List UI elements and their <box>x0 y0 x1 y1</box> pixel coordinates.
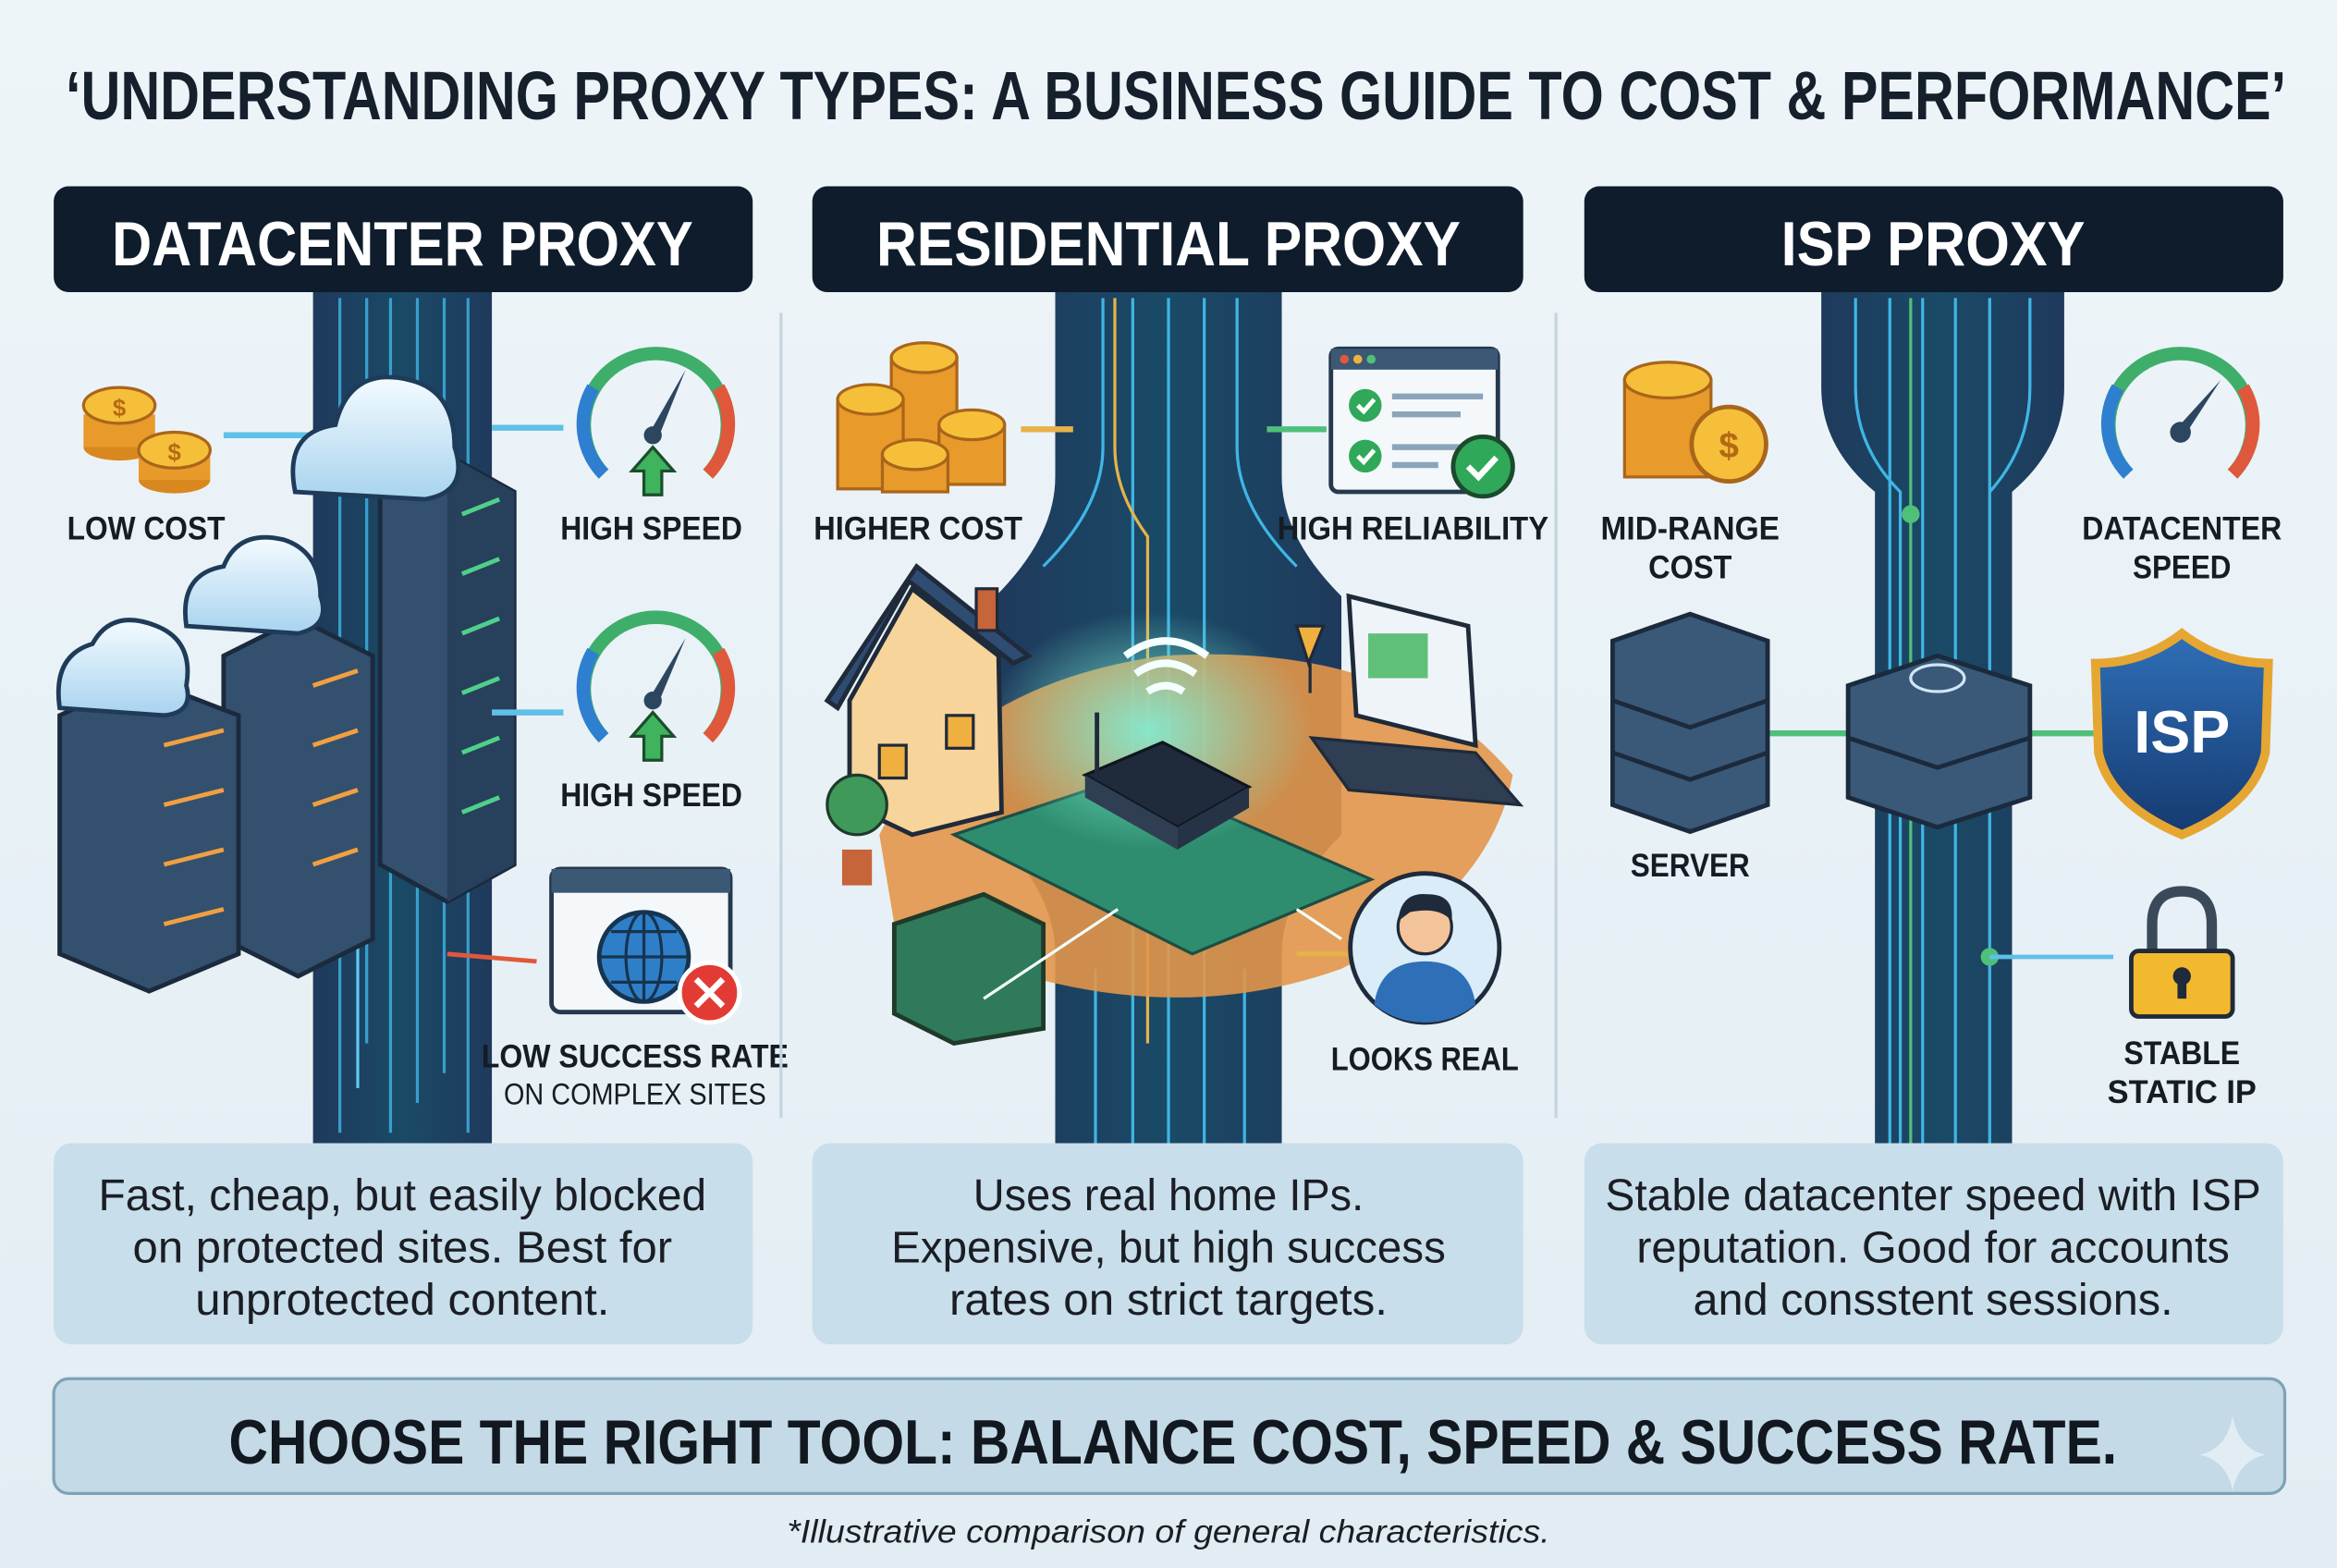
footnote: *Illustrative comparison of general characteristics. <box>787 1513 1550 1550</box>
icon: person looks real <box>1297 874 1499 1023</box>
icon: isp shield: ISP <box>2134 699 2230 766</box>
description: datacenter <box>54 1144 752 1344</box>
label: stable static ip: STABLE <box>2123 1035 2240 1072</box>
label: mid-range cost <box>1601 510 1780 586</box>
description: isp: and consstent sessions. <box>1693 1275 2173 1325</box>
label: high reliability: HIGH RELIABILITY <box>1278 510 1548 547</box>
description: residential <box>813 1144 1523 1344</box>
label: mid-range cost: COST <box>1648 549 1732 586</box>
header: residential proxy <box>813 187 1523 292</box>
icon: reliability checklist <box>1266 349 1512 496</box>
header: residential proxy: RESIDENTIAL PROXY <box>876 210 1461 279</box>
description: datacenter: unprotected content. <box>195 1275 609 1325</box>
label: higher cost: HIGHER COST <box>814 510 1022 547</box>
label: stable static ip <box>2108 1035 2257 1110</box>
panel: isp proxy <box>1585 187 2283 1344</box>
label: low success rate <box>482 1037 789 1111</box>
icon: gauge high speed 2 <box>492 618 728 760</box>
label: mid-range cost: MID-RANGE <box>1601 510 1780 547</box>
header: datacenter proxy: DATACENTER PROXY <box>112 210 693 279</box>
description: isp <box>1585 1144 2283 1344</box>
label: datacenter speed: SPEED <box>2133 549 2231 586</box>
panel: datacenter proxy <box>54 187 789 1344</box>
label: server: SERVER <box>1631 847 1750 884</box>
label: looks real: LOOKS REAL <box>1331 1041 1519 1078</box>
icon: blocked browser <box>447 869 740 1023</box>
icon: isp shield <box>2096 633 2269 835</box>
label: stable static ip: STATIC IP <box>2108 1073 2257 1110</box>
icon: coins mid-range <box>1624 362 1766 482</box>
label: high speed 2: HIGH SPEED <box>560 777 742 814</box>
description: residential: Uses real home IPs. <box>973 1170 1364 1220</box>
icon: coins low cost <box>83 387 316 494</box>
description: isp: reputation. Good for accounts <box>1636 1223 2230 1273</box>
icon: padlock <box>2131 891 2233 1016</box>
icon: server stack <box>1612 614 2104 832</box>
icon: gauge high speed 1 <box>492 353 728 495</box>
road: isp <box>1821 292 2113 1145</box>
icon: coins higher cost <box>838 343 1073 492</box>
label: low success rate: ON COMPLEX SITES <box>504 1078 766 1111</box>
label: low cost: LOW COST <box>67 510 226 547</box>
header: isp proxy <box>1585 187 2283 292</box>
road: datacenter <box>224 292 492 1145</box>
icon: coins mid-range: $ <box>1719 426 1739 466</box>
label: datacenter speed: DATACENTER <box>2082 510 2282 547</box>
icon: sparkle <box>2200 1416 2266 1490</box>
description: datacenter: on protected sites. Best for <box>133 1223 672 1273</box>
label: low success rate: LOW SUCCESS RATE <box>482 1037 789 1074</box>
icon: servers and clouds <box>58 377 514 991</box>
footer banner <box>54 1378 2285 1493</box>
icon: coins low cost: $ <box>168 440 181 466</box>
panel: residential proxy <box>813 187 1548 1344</box>
road: residential <box>996 292 1341 1145</box>
description: isp: Stable datacenter speed with ISP <box>1605 1170 2261 1220</box>
illustration: home room with router <box>827 567 1520 1044</box>
icon: gauge datacenter speed <box>2108 353 2253 474</box>
header: datacenter proxy <box>54 187 752 292</box>
description: datacenter: Fast, cheap, but easily blocked <box>98 1170 706 1220</box>
description: residential: rates on strict targets. <box>949 1275 1388 1325</box>
icon: coins low cost: $ <box>113 396 126 422</box>
label: datacenter speed <box>2082 510 2282 586</box>
label: high speed 1: HIGH SPEED <box>560 510 742 547</box>
description: residential: Expensive, but high success <box>891 1223 1446 1273</box>
header: isp proxy: ISP PROXY <box>1781 210 2085 279</box>
